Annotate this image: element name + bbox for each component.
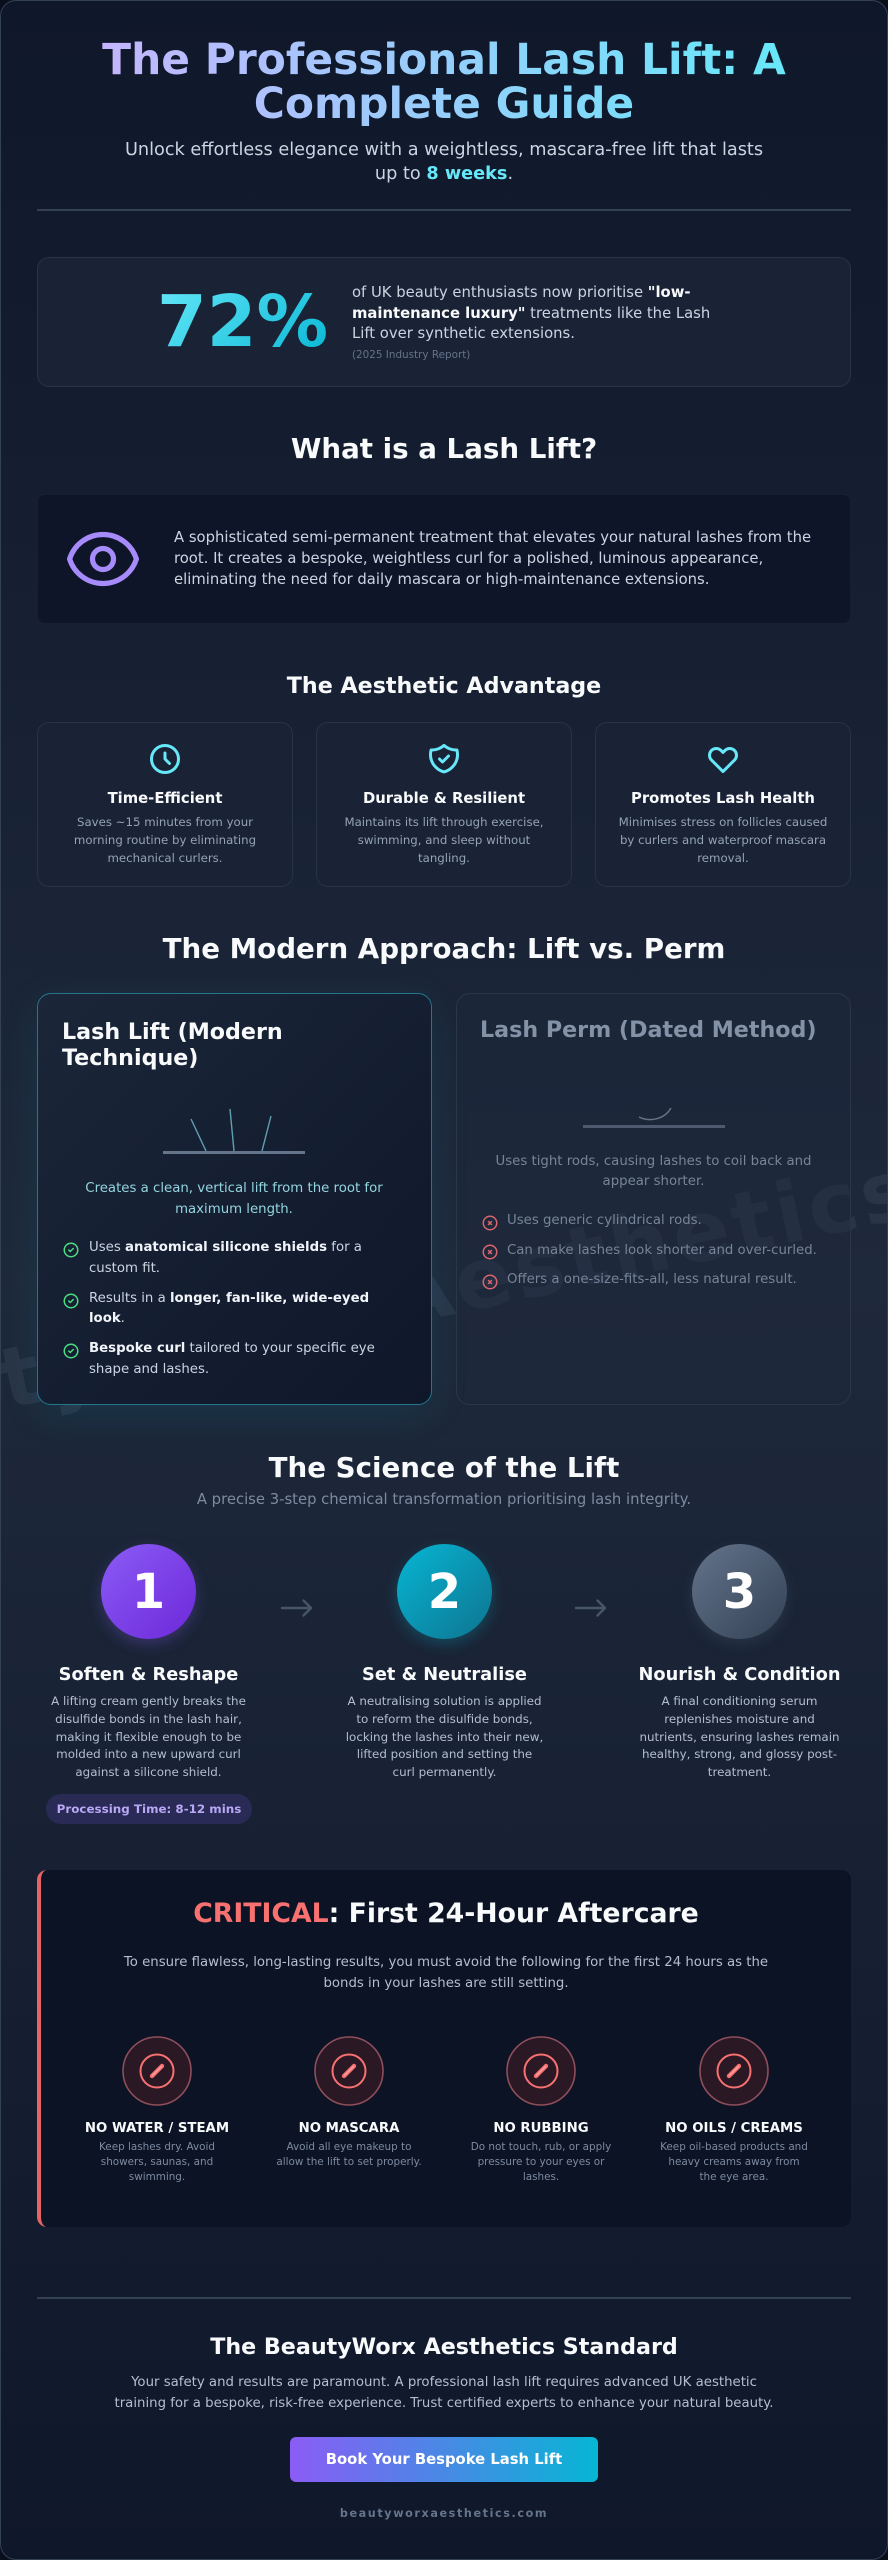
step text: healthy, strong, and glossy post- xyxy=(642,1747,837,1761)
definition text xyxy=(174,529,811,588)
card title: Durable & Resilient xyxy=(363,790,525,807)
stat description xyxy=(352,284,710,342)
arrow xyxy=(280,1599,312,1617)
step text: molded into a new upward curl xyxy=(56,1747,241,1761)
benefit text xyxy=(89,1341,375,1377)
heading: aesthetic advantage: The Aesthetic Advantage xyxy=(287,673,601,699)
step text xyxy=(639,1694,840,1779)
step text: to reform the disulfide bonds, xyxy=(356,1712,533,1726)
step text: nutrients, ensuring lashes remain xyxy=(639,1730,840,1744)
subtitle: up to 8 weeks. xyxy=(375,164,513,184)
benefit text: Results in a longer, fan-like, wide-eyed xyxy=(89,1290,369,1306)
icon: prohibition xyxy=(699,2036,769,2106)
card: time-efficient xyxy=(37,722,293,887)
step 2 xyxy=(346,1544,543,1779)
rule text: Avoid all eye makeup to xyxy=(287,2141,411,2153)
definition text: A sophisticated semi-permanent treatment that elevates your natural lashes from the xyxy=(174,529,811,546)
processing time pill: Processing Time: 8-12 mins xyxy=(57,1802,241,1816)
step text: A final conditioning serum xyxy=(662,1694,817,1708)
benefit text: Uses anatomical silicone shields for a xyxy=(89,1240,362,1255)
rule title: NO OILS / CREAMS xyxy=(665,2121,803,2136)
icon: eye xyxy=(67,532,139,586)
step text: disulfide bonds in the lash hair, xyxy=(55,1712,242,1726)
footer text: training for a bespoke, risk-free experience. Trust certified experts to enhance your natural beauty. xyxy=(114,2396,773,2411)
lift benefits xyxy=(64,1240,375,1377)
benefit text: custom fit. xyxy=(89,1261,160,1276)
rule text: pressure to your eyes or xyxy=(478,2156,604,2168)
definition text: eliminating the need for daily mascara or high-maintenance extensions. xyxy=(174,571,709,588)
step text: locking the lashes into their new, xyxy=(346,1730,543,1744)
rule text xyxy=(99,2141,215,2183)
rule text xyxy=(445,2140,637,2184)
heading: what is a lash lift: What is a Lash Lift? xyxy=(291,432,597,465)
card text: removal. xyxy=(697,851,749,865)
rule text: heavy creams away from xyxy=(668,2156,800,2168)
check icon xyxy=(64,1344,78,1358)
title: The Professional Lash Lift: A xyxy=(102,35,786,84)
rule text: lashes. xyxy=(523,2171,559,2183)
rule title: NO RUBBING xyxy=(493,2121,589,2136)
rule title: NO MASCARA xyxy=(299,2121,399,2136)
subtitle xyxy=(125,140,763,184)
card text xyxy=(344,815,544,865)
aftercare title: CRITICAL: First 24-Hour Aftercare xyxy=(193,1898,699,1929)
lift caption: Creates a clean, vertical lift from the root for xyxy=(85,1181,383,1196)
definition text: root. It creates a bespoke, weightless curl for a polished, luminous appearance, xyxy=(174,550,763,567)
check icon xyxy=(64,1242,78,1258)
card text xyxy=(74,815,256,865)
step text: replenishes moisture and xyxy=(664,1712,815,1726)
rule text xyxy=(638,2140,830,2184)
step text: treatment. xyxy=(708,1765,771,1779)
card text: morning routine by eliminating xyxy=(74,833,256,847)
card: durable xyxy=(316,722,572,887)
lift title: Technique) xyxy=(62,1045,198,1071)
rule: no rubbing xyxy=(445,2036,637,2186)
heading: lift vs perm: The Modern Approach: Lift vs. Perm xyxy=(163,932,725,965)
step text xyxy=(346,1694,543,1779)
aftercare intro: bonds in your lashes are still setting. xyxy=(323,1976,569,1991)
panel: lash perm xyxy=(456,993,851,1405)
perm illustration xyxy=(583,1108,725,1128)
big number 72%: 72% xyxy=(157,280,328,363)
benefit text xyxy=(89,1290,369,1326)
call to action button xyxy=(290,2437,598,2482)
perm title: Lash Perm (Dated Method) xyxy=(480,1017,817,1043)
benefit text: look. xyxy=(89,1311,125,1326)
step text: making it flexible enough to be xyxy=(56,1730,241,1744)
icon: shield check xyxy=(429,744,459,774)
rule text xyxy=(253,2140,445,2170)
perm caption xyxy=(496,1154,811,1189)
step number circle xyxy=(397,1544,492,1639)
aftercare intro: To ensure flawless, long-lasting results, you must avoid the following for the first 24 hours as the xyxy=(124,1955,768,1970)
science subtitle: A precise 3-step chemical transformation prioritising lash integrity. xyxy=(197,1491,691,1508)
cross icon xyxy=(482,1216,498,1230)
perm caption: appear shorter. xyxy=(603,1174,704,1189)
title: Complete Guide xyxy=(254,79,634,128)
stat description: Lift over synthetic extensions. xyxy=(352,325,575,342)
card text: Maintains its lift through exercise, xyxy=(344,815,544,829)
step number circle: 1 xyxy=(132,1564,165,1620)
perm caption: Uses tight rods, causing lashes to coil back and xyxy=(496,1154,811,1168)
processing time pill xyxy=(46,1794,252,1824)
icon: heart xyxy=(708,747,738,774)
card text: Saves ~15 minutes from your xyxy=(77,815,253,829)
step number circle xyxy=(101,1544,196,1639)
rule text: allow the lift to set properly. xyxy=(276,2156,422,2168)
panel: aftercare xyxy=(37,1870,851,2227)
perm drawbacks xyxy=(482,1213,817,1290)
rule text: swimming. xyxy=(129,2171,185,2183)
card title: Time-Efficient xyxy=(108,790,222,807)
rule text: the eye area. xyxy=(699,2171,769,2183)
rule text: Keep lashes dry. Avoid xyxy=(99,2141,215,2153)
stat source: (2025 Industry Report) xyxy=(352,349,470,361)
rule title: NO WATER / STEAM xyxy=(85,2121,229,2136)
rule: no water xyxy=(85,2036,229,2183)
step text: against a silicone shield. xyxy=(75,1765,222,1779)
icon: prohibition xyxy=(122,2036,192,2106)
footer text: Your safety and results are paramount. A professional lash lift requires advanced UK aesthetic xyxy=(131,2375,757,2390)
step text: A lifting cream gently breaks the xyxy=(51,1694,246,1708)
step title: Set & Neutralise xyxy=(362,1664,527,1685)
stat description: maintenance luxury" treatments like the Lash xyxy=(352,305,710,322)
icon: clock xyxy=(150,744,180,774)
rule: no oils xyxy=(638,2036,830,2186)
step number circle xyxy=(692,1544,787,1639)
aftercare intro xyxy=(124,1955,768,1991)
step text xyxy=(51,1694,246,1779)
rule text: Keep oil-based products and xyxy=(660,2141,808,2153)
cross icon xyxy=(482,1244,498,1260)
benefit text: Bespoke curl tailored to your specific eye xyxy=(89,1341,375,1356)
rule text: showers, saunas, and xyxy=(101,2156,213,2168)
cross icon xyxy=(482,1274,498,1290)
card text xyxy=(619,815,827,865)
step number circle: 3 xyxy=(723,1564,756,1620)
icon: prohibition xyxy=(314,2036,384,2106)
benefit text: shape and lashes. xyxy=(89,1362,209,1377)
card text: by curlers and waterproof mascara xyxy=(620,833,826,847)
stat description: of UK beauty enthusiasts now prioritise "low- xyxy=(352,284,691,301)
step 3 xyxy=(639,1544,840,1779)
lift illustration xyxy=(163,1108,305,1154)
lift caption xyxy=(85,1181,383,1217)
footer text xyxy=(1,2373,887,2415)
title xyxy=(102,35,786,128)
panel: lash lift xyxy=(37,993,432,1405)
check icon xyxy=(64,1294,78,1308)
step 1 xyxy=(46,1543,252,1824)
card title: Promotes Lash Health xyxy=(631,790,815,807)
drawback text: Can make lashes look shorter and over-curled. xyxy=(507,1242,817,1258)
card text: swimming, and sleep without xyxy=(358,833,530,847)
lift title xyxy=(62,1018,283,1071)
step number circle: 2 xyxy=(428,1564,461,1620)
call to action button: Book Your Bespoke Lash Lift xyxy=(326,2451,562,2468)
drawback text: Offers a one-size-fits-all, less natural result. xyxy=(507,1272,797,1287)
heading: science of the lift: The Science of the Lift xyxy=(269,1451,619,1484)
benefit text xyxy=(89,1240,362,1276)
step title: Soften & Reshape xyxy=(59,1664,238,1685)
step title: Nourish & Condition xyxy=(639,1664,840,1685)
arrow xyxy=(574,1599,606,1617)
footer heading: The BeautyWorx Aesthetics Standard xyxy=(210,2334,678,2360)
card: lash health xyxy=(595,722,851,887)
subtitle: Unlock effortless elegance with a weightless, mascara-free lift that lasts xyxy=(125,140,763,160)
step text: curl permanently. xyxy=(393,1765,496,1779)
step text: A neutralising solution is applied xyxy=(347,1694,542,1708)
rule: no mascara xyxy=(253,2036,445,2186)
panel: statistic xyxy=(37,257,851,387)
lift title: Lash Lift (Modern xyxy=(62,1018,283,1044)
drawback text: Uses generic cylindrical rods. xyxy=(507,1213,702,1228)
icon: prohibition xyxy=(506,2036,576,2106)
rule text: Do not touch, rub, or apply xyxy=(471,2141,611,2153)
card text: Minimises stress on follicles caused xyxy=(619,815,827,829)
card text: mechanical curlers. xyxy=(107,851,223,865)
lift caption: maximum length. xyxy=(175,1202,293,1217)
step text: lifted position and setting the xyxy=(357,1747,532,1761)
website: beautyworxaesthetics.com xyxy=(340,2507,548,2520)
panel: definition xyxy=(37,494,851,624)
card text: tangling. xyxy=(418,851,470,865)
